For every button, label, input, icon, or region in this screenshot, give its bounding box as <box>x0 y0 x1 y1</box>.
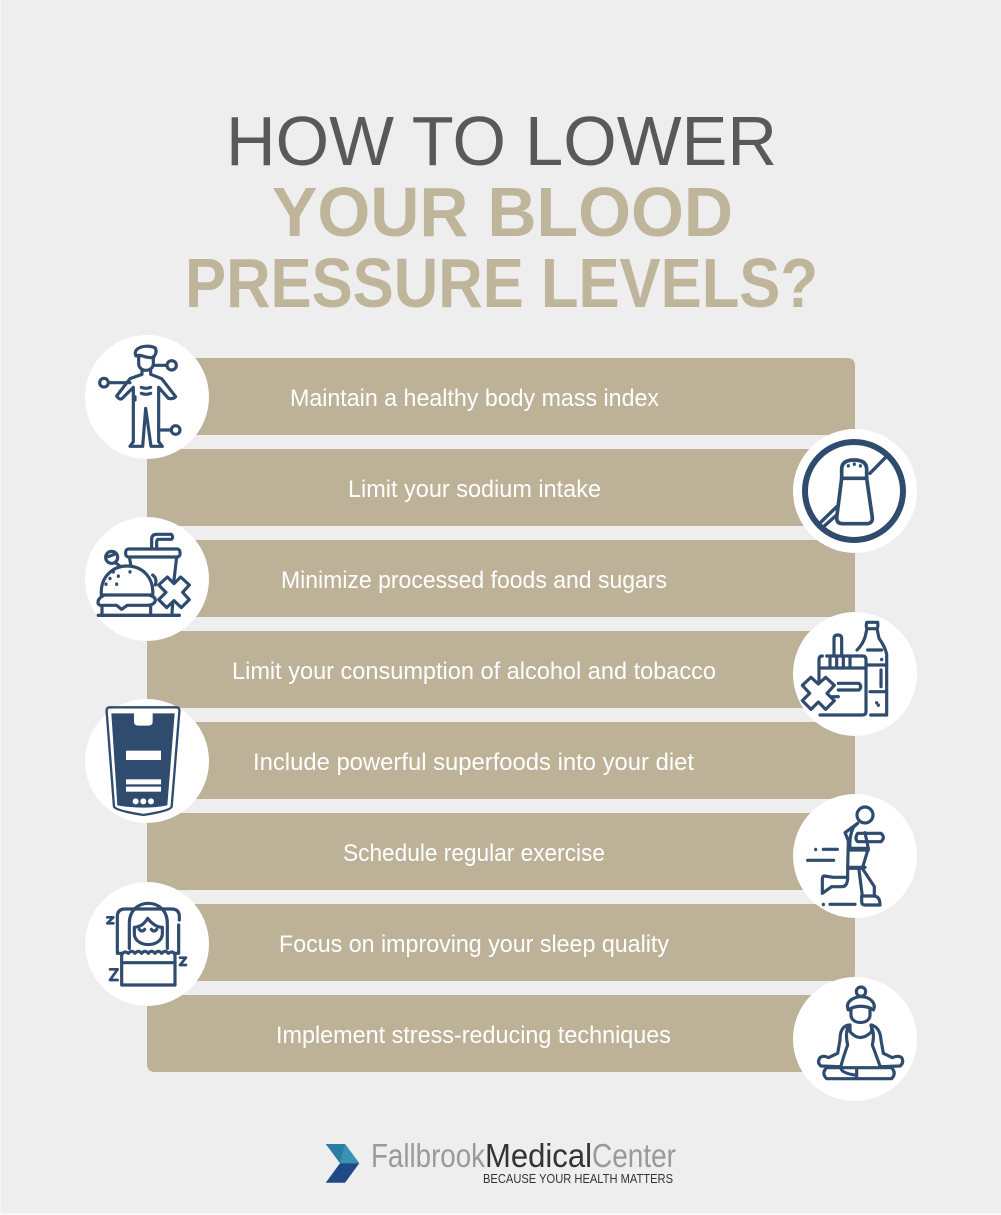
tip bar 8: Implement stress-reducing techniques <box>276 1022 671 1049</box>
tip bar 5 <box>147 722 855 799</box>
tip bar 3 <box>147 540 855 617</box>
icon: superfood pouch <box>85 699 209 823</box>
wordmark <box>371 1137 676 1174</box>
icon: runner <box>793 794 917 918</box>
tip bar 8 <box>147 995 855 1072</box>
tip bar 6: Schedule regular exercise <box>343 840 605 867</box>
tip bar 2 <box>147 449 855 526</box>
logo: Fallbrook Medical Center <box>326 1137 676 1186</box>
tip bar 7 <box>147 904 855 981</box>
icon: body mass figure <box>85 335 209 459</box>
tip bar 6 <box>147 813 855 890</box>
icon: salt shaker prohibited <box>793 429 917 553</box>
icon: logo chevron <box>326 1144 359 1183</box>
tagline: BECAUSE YOUR HEALTH MATTERS <box>483 1171 673 1186</box>
tip bar 3: Minimize processed foods and sugars <box>281 567 667 594</box>
tip bar 4 <box>147 631 855 708</box>
title: YOUR BLOOD <box>272 173 733 251</box>
tip bar 7: Focus on improving your sleep quality <box>279 931 669 958</box>
tip bar 1 <box>147 358 855 435</box>
title <box>185 102 818 322</box>
wordmark: Fallbrook <box>371 1137 485 1174</box>
title: HOW TO LOWER <box>226 102 777 180</box>
icon: meditating woman <box>793 977 917 1101</box>
tip bar 4: Limit your consumption of alcohol and tobacco <box>232 658 716 685</box>
icon: burger and soda with cross <box>85 517 209 641</box>
wordmark: Center <box>592 1137 676 1174</box>
tip bar 1: Maintain a healthy body mass index <box>290 385 659 412</box>
icon: cigarettes and alcohol with cross <box>793 612 917 736</box>
panel: tip list <box>147 358 855 1072</box>
wordmark: Medical <box>485 1137 592 1174</box>
tip bar 2: Limit your sodium intake <box>348 476 601 503</box>
title: PRESSURE LEVELS? <box>185 244 818 322</box>
tip bar 5: Include powerful superfoods into your diet <box>253 749 694 776</box>
icon: sleeping person in bed <box>85 882 209 1006</box>
